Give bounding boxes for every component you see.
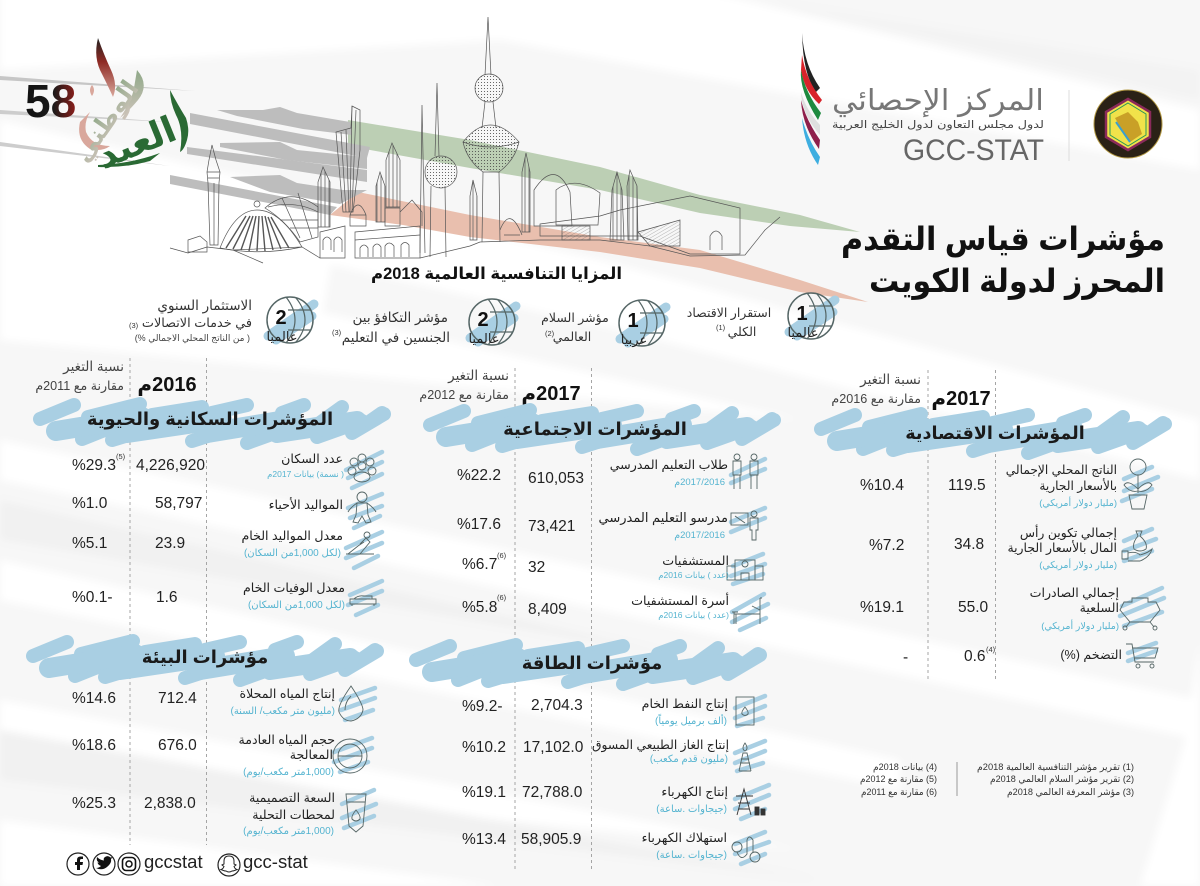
row: desalination capacity: (1,000متر مكعب/يوم): [243, 826, 334, 837]
row: live births: المواليد الأحياء: [269, 497, 343, 513]
ranking: macro stability: (1): [716, 323, 726, 332]
row: desalination capacity: 2,838.0: [144, 795, 196, 812]
row: GDP: [860, 459, 1158, 509]
row: school students: 2017/2016م: [674, 477, 725, 488]
tower: second Kuwait tower: [420, 83, 457, 257]
row: inflation: -: [903, 649, 908, 666]
row: marketed natural gas: %10.2: [462, 739, 506, 756]
row: crude birth rate: [72, 529, 382, 568]
row: crude oil: [462, 696, 765, 727]
panel: demographic indicators: [35, 358, 384, 845]
row: electricity consumption: 58,905.9: [521, 831, 581, 848]
row: live births: %1.0: [72, 495, 108, 512]
row: crude oil: إنتاج النفط الخام: [642, 697, 728, 712]
row: school students: %22.2: [457, 467, 501, 484]
skyline drawing: [170, 17, 780, 263]
row: marketed natural gas: (مليون قدم مكعب): [650, 754, 728, 765]
change header: نسبة التغير: [62, 359, 124, 375]
row: crude birth rate: معدل المواليد الخام: [241, 529, 343, 544]
change header: [831, 372, 921, 407]
domes: [220, 174, 600, 252]
row: desalination capacity: السعة التصميمية: [249, 791, 335, 805]
row: electricity production: إنتاج الكهرباء: [661, 785, 728, 800]
row: hospitals: (6): [497, 551, 507, 560]
row: electricity production: [462, 784, 769, 819]
ranking: telecom investment: الاستثمار السنوي: [157, 298, 252, 314]
row: hospital beds: [462, 592, 768, 630]
handle: gcc-stat: gcc-stat: [243, 851, 308, 872]
panel: energy indicators: [416, 645, 769, 864]
row: goods exports: 55.0: [958, 599, 989, 616]
row: GDP: 119.5: [948, 477, 986, 494]
row: inflation: [903, 643, 1158, 668]
row: hospital beds: (6): [497, 593, 507, 602]
section banner: مؤشرات الطاقة: [522, 653, 662, 674]
row: goods exports: إجمالي الصادرات: [1030, 586, 1119, 601]
logo Latin name: GCC-STAT: [903, 134, 1044, 167]
row: school teachers: [457, 508, 765, 541]
row: desalination capacity: [72, 790, 376, 837]
row: live births: 58,797: [155, 495, 202, 512]
ranking: telecom investment: عالميا: [266, 329, 298, 344]
row: capital formation: [869, 524, 1156, 571]
row: GDP: بالأسعار الجارية: [1039, 478, 1117, 494]
icon: GCC seal: [1094, 90, 1162, 158]
year: 2016م: [137, 374, 197, 396]
icon: facebook: [67, 853, 89, 875]
calligraphy text: العيد: [91, 108, 182, 177]
notes column 1: [977, 762, 1134, 798]
row: electricity consumption: [462, 831, 769, 864]
year: 2017م: [521, 383, 581, 405]
GCC-STAT logo: [801, 33, 1162, 167]
row: crude oil: (ألف برميل يومياً): [655, 713, 727, 727]
row: crude death rate: (لكل 1,000من السكان): [248, 600, 345, 611]
notes column 1: (3) مؤشر المعرفة العالمي 2018م: [1007, 787, 1134, 798]
calligraphy flame: [96, 38, 115, 97]
tower: main Kuwait tower: [463, 17, 519, 242]
row: marketed natural gas: [462, 738, 765, 771]
row: goods exports: [860, 586, 1164, 632]
row: population: (5): [116, 452, 126, 461]
ranking: gender parity: مؤشر التكافؤ بين: [352, 310, 448, 326]
section banner: [821, 414, 1165, 453]
ranking: gender parity: [332, 299, 516, 346]
ranking: gender parity: عالميا: [468, 331, 500, 346]
ranking: gender parity: 2: [477, 309, 489, 331]
calligraphy text: [68, 70, 188, 177]
row: school teachers: %17.6: [457, 516, 501, 533]
row: inflation: 0.6: [964, 648, 986, 665]
row: school students: طلاب التعليم المدرسي: [610, 458, 728, 473]
row: population: 4,226,920: [136, 457, 205, 474]
row: desalination capacity: لمحطات التحلية: [252, 808, 335, 822]
ranking: macro stability: 1: [796, 303, 808, 325]
row: electricity production: 72,788.0: [522, 784, 583, 801]
row: treated wastewater: [72, 733, 372, 778]
row: hospitals: المستشفيات: [662, 554, 729, 568]
row: GDP: (مليار دولار أمريكي): [1039, 496, 1117, 509]
row: marketed natural gas: 17,102.0: [523, 739, 584, 756]
row: population: عدد السكان: [281, 452, 343, 466]
section banner: [416, 645, 760, 684]
row: treated wastewater: %18.6: [72, 737, 116, 754]
row: electricity consumption: %13.4: [462, 831, 506, 848]
change header: نسبة التغير: [447, 368, 509, 384]
notes column 2: (6) مقارنة مع 2011م: [861, 787, 937, 798]
panel: environment indicators: [33, 641, 377, 837]
row: goods exports: %19.1: [860, 599, 904, 616]
ranking: telecom investment: 2: [275, 307, 287, 329]
grey brush strokes: [0, 76, 370, 215]
row: crude birth rate: 23.9: [155, 535, 185, 552]
section banner: المؤشرات الاجتماعية: [503, 419, 687, 440]
competitive advantages heading: المزايا التنافسية العالمية 2018م: [371, 265, 622, 284]
ranking: macro stability: استقرار الاقتصاد: [687, 306, 771, 321]
panel: economic indicators: [821, 370, 1165, 680]
ranking: telecom investment: في خدمات الاتصالات: [142, 315, 252, 330]
ranking: peace index: مؤشر السلام: [541, 311, 609, 326]
row: marketed natural gas: إنتاج الغاز الطبيعي المسوق: [592, 738, 729, 753]
notes column 1: (1) تقرير مؤشر التنافسية العالمية 2018م: [977, 762, 1134, 773]
social media handles: [67, 851, 308, 876]
row: live births: [72, 492, 382, 528]
notes column 2: (4) بيانات 2018م: [873, 762, 937, 773]
row: crude death rate: [72, 581, 382, 615]
ranking: peace index: عربيا: [621, 332, 647, 348]
ranking: telecom investment: ( من الناتج المحلي الاجمالي %): [135, 333, 250, 343]
row: desalination capacity: %25.3: [72, 795, 116, 812]
change header: نسبة التغير: [859, 372, 921, 388]
main title: مؤشرات قياس التقدم: [841, 221, 1165, 258]
badge number: 58: [25, 75, 76, 127]
row: desalinated water: %14.6: [72, 690, 116, 707]
row: GDP: الناتج المحلي الإجمالي: [1006, 463, 1117, 477]
ranking: gender parity: الجنسين في التعليم: [342, 330, 450, 346]
tower: Al Hamra: [336, 106, 360, 212]
notes column 1: (2) تقرير مؤشر السلام العالمي 2018م: [990, 774, 1134, 785]
row: hospitals: (عدد ) بيانات 2016م: [658, 570, 729, 580]
change header: مقارنة مع 2016م: [831, 392, 921, 407]
logo ribbon: [801, 33, 822, 165]
icon: twitter: [93, 853, 115, 875]
change header: مقارنة مع 2012م: [419, 388, 509, 403]
row: hospitals: %6.7: [462, 556, 497, 573]
row: goods exports: (مليار دولار أمريكي): [1041, 619, 1119, 632]
handle: gccstat: gccstat: [144, 851, 203, 872]
notes column 2: (5) مقارنة مع 2012م: [860, 774, 937, 785]
row: crude death rate: %0.1-: [72, 589, 112, 606]
row: electricity consumption: (جيجاوات .ساعة): [656, 850, 727, 861]
row: capital formation: المال بالأسعار الجارية: [1007, 540, 1117, 556]
row: capital formation: (مليار دولار أمريكي): [1039, 558, 1117, 571]
row: school teachers: مدرسو التعليم المدرسي: [599, 510, 728, 526]
ranking: gender parity: (3): [332, 328, 342, 337]
ranking: macro stability: عالميا: [787, 325, 819, 340]
row: goods exports: السلعية: [1080, 601, 1119, 615]
row: electricity production: (جيجاوات .ساعة): [656, 804, 727, 815]
row: crude death rate: 1.6: [156, 589, 178, 606]
row: capital formation: %7.2: [869, 537, 904, 554]
row: desalinated water: [72, 686, 375, 721]
row: school students: [457, 454, 765, 489]
row: hospital beds: أسرة المستشفيات: [631, 592, 729, 609]
row: GDP: %10.4: [860, 477, 904, 494]
row: crude birth rate: (لكل 1,000من السكان): [244, 548, 341, 559]
section banner: المؤشرات الاقتصادية: [905, 423, 1085, 444]
ranking: peace index: [541, 300, 666, 348]
main title: [841, 221, 1165, 300]
row: hospital beds: (عدد ) بيانات 2016م: [658, 610, 729, 620]
row: population: [72, 452, 382, 488]
icon: snapchat: [218, 854, 240, 876]
row: hospital beds: %5.8: [462, 599, 497, 616]
row: treated wastewater: (1,000متر مكعب/يوم): [243, 767, 334, 778]
section banner: المؤشرات السكانية والحيوية: [87, 409, 333, 430]
row: hospitals: 32: [528, 559, 545, 576]
ranking: peace index: 1: [627, 310, 639, 332]
minarets: [207, 143, 638, 245]
row: school teachers: 2017/2016م: [674, 530, 725, 541]
ranking: macro stability: الكلي: [728, 325, 756, 339]
calligraphy text: الوطني: [68, 75, 145, 168]
row: hospital beds: 8,409: [528, 601, 567, 618]
row: hospitals: [462, 551, 765, 584]
row: school students: 610,053: [528, 470, 584, 487]
mosque and palace buildings: [170, 196, 780, 263]
icon: instagram: [118, 853, 140, 875]
ranking: telecom investment: (3): [129, 321, 139, 330]
section banner: [40, 404, 384, 443]
event badge: 58th national day: [25, 38, 188, 177]
section banner: مؤشرات البيئة: [142, 647, 268, 668]
row: desalinated water: 712.4: [158, 690, 197, 707]
row: capital formation: 34.8: [954, 536, 984, 553]
skyline colour bands: [330, 120, 868, 302]
row: inflation: (4): [986, 645, 996, 654]
logo Arabic name: المركز الإحصائي: [832, 85, 1044, 118]
ranking: peace index: (2): [545, 329, 555, 338]
ranking: telecom investment: [129, 297, 314, 344]
row: treated wastewater: حجم المياه العادمة: [238, 733, 335, 748]
section banner: [33, 641, 377, 680]
change header: [419, 368, 509, 403]
row: electricity production: %19.1: [462, 784, 506, 801]
row: treated wastewater: 676.0: [158, 737, 197, 754]
row: inflation: التضخم (%): [1060, 648, 1122, 663]
row: desalinated water: إنتاج المياه المحلاة: [240, 687, 335, 702]
panel: competitive rankings: [129, 293, 835, 348]
row: crude oil: %9.2-: [462, 698, 502, 715]
logo Arabic subtitle: لدول مجلس التعاون لدول الخليج العربية: [832, 119, 1044, 131]
row: crude oil: 2,704.3: [531, 697, 583, 714]
row: crude birth rate: %5.1: [72, 535, 107, 552]
year: 2017م: [931, 388, 991, 410]
main title: المحرز لدولة الكويت: [869, 263, 1165, 300]
section banner: [430, 410, 774, 449]
row: electricity consumption: استهلاك الكهرباء: [642, 831, 727, 846]
change header: [35, 359, 124, 394]
row: crude death rate: معدل الوفيات الخام: [243, 581, 345, 596]
ranking: macro stability: [687, 293, 835, 340]
row: population: ( نسمة) بيانات 2017م: [267, 469, 344, 479]
change header: مقارنة مع 2011م: [35, 379, 124, 394]
notes column 2: [860, 762, 937, 798]
ranking: peace index: العالمي: [553, 330, 591, 344]
footnotes: [860, 762, 1134, 798]
row: school teachers: 73,421: [528, 518, 575, 535]
row: desalinated water: (مليون متر مكعب/ السنة): [230, 706, 335, 717]
panel: social indicators: [419, 368, 774, 870]
row: population: %29.3: [72, 457, 116, 474]
row: capital formation: إجمالي تكوين رأس: [1020, 524, 1117, 541]
row: treated wastewater: المعالجة: [290, 748, 333, 762]
